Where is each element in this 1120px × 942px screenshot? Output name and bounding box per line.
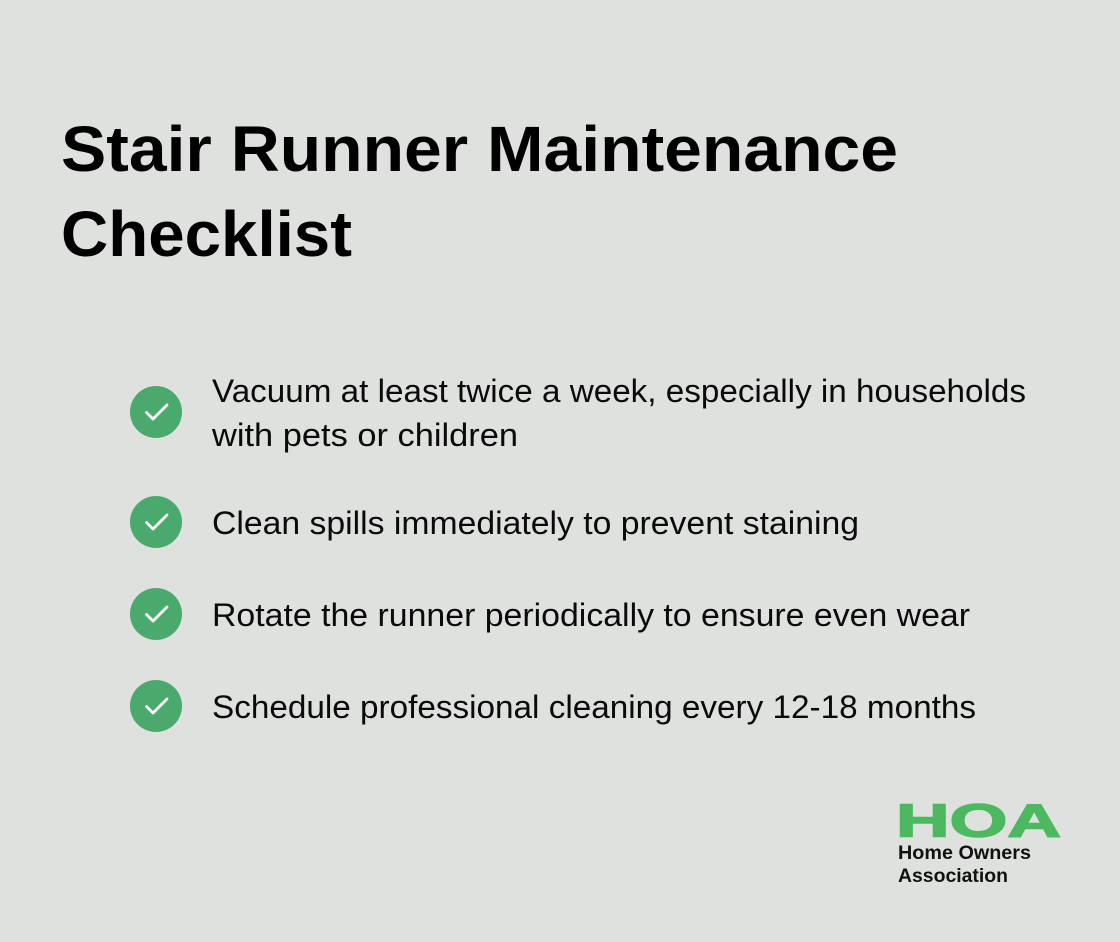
checklist	[130, 373, 1026, 732]
title	[61, 113, 898, 270]
logo: HOA: Home Owners	[898, 843, 1031, 864]
item text: Clean spills immediately to prevent staining	[212, 505, 859, 541]
item 3: rotate	[130, 588, 970, 640]
icon: check circle	[130, 588, 182, 640]
title: Stair Runner Maintenance	[61, 113, 898, 185]
item text	[211, 373, 1026, 453]
item text: with pets or children	[211, 417, 518, 453]
icon: check circle	[130, 680, 182, 732]
item 1: vacuum	[130, 373, 1026, 453]
logo: HOA	[896, 794, 1061, 887]
item text: Rotate the runner periodically to ensure even wear	[212, 597, 970, 633]
item 2: spills	[130, 496, 859, 548]
title: Checklist	[61, 198, 352, 270]
logo: HOA: Association	[898, 866, 1008, 887]
item text: Schedule professional cleaning every 12-18 months	[212, 689, 976, 725]
item 4: professional cleaning	[130, 680, 976, 732]
logo: HOA: HOA	[896, 794, 1061, 846]
icon: check circle	[130, 496, 182, 548]
item text: Vacuum at least twice a week, especially in households	[212, 373, 1026, 409]
icon: check circle	[130, 386, 182, 438]
